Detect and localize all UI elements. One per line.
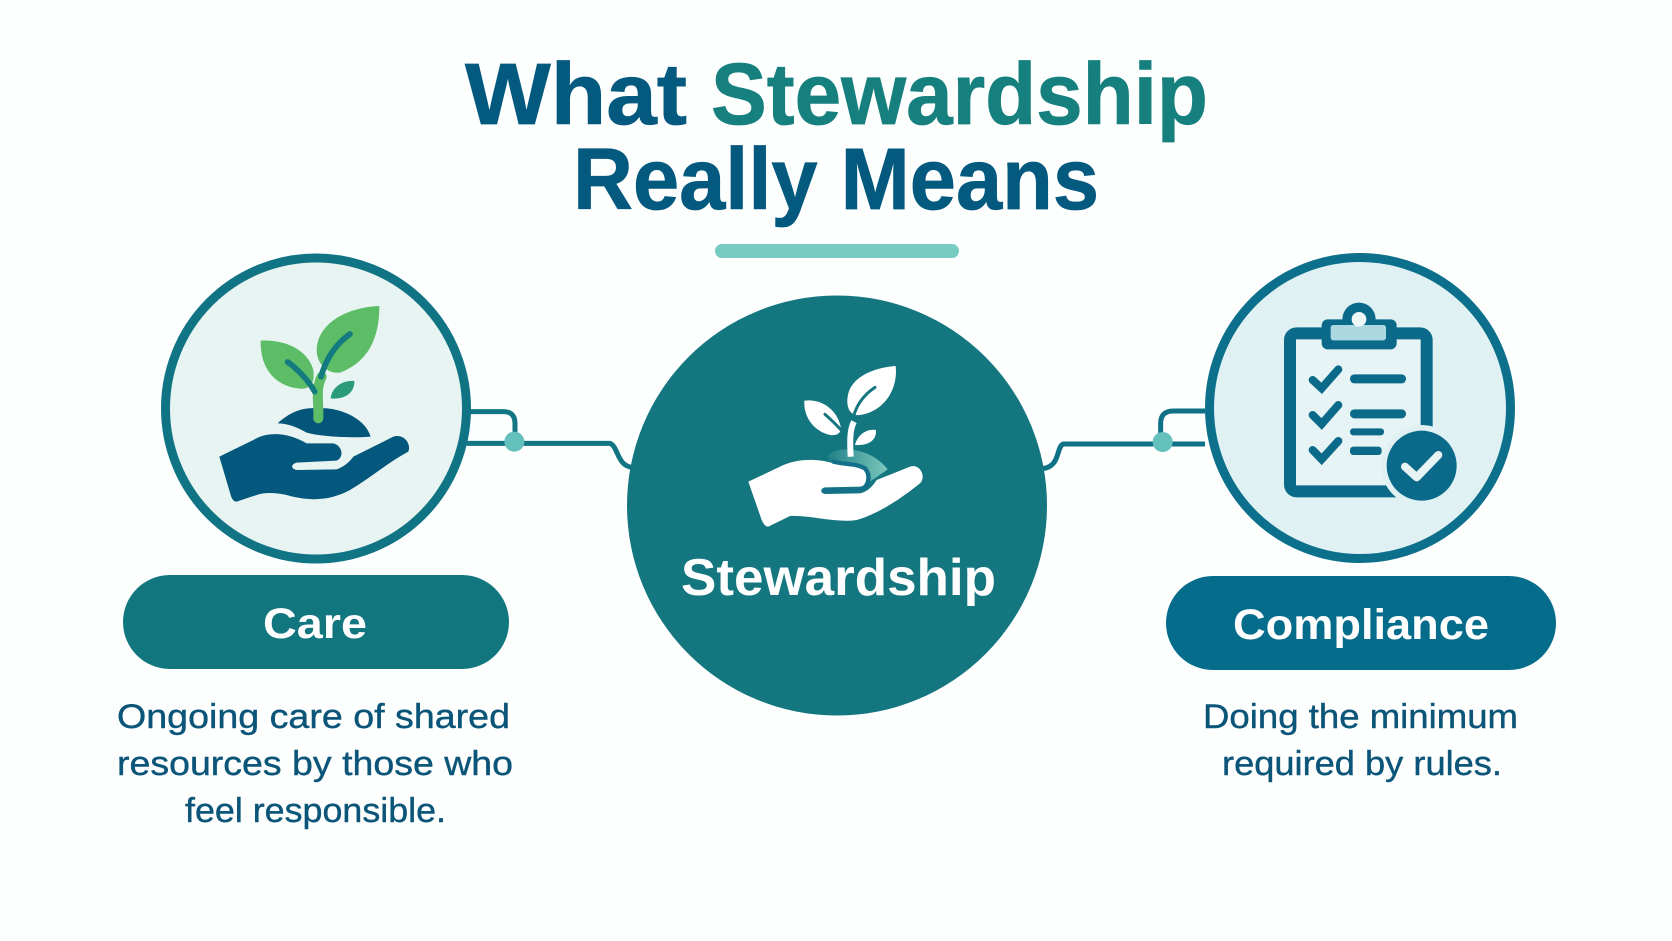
title: What xyxy=(465,46,687,143)
panel: compliance circle with icon xyxy=(1210,258,1510,558)
icon: clipboard with checklist xyxy=(1290,303,1462,506)
pill: compliance xyxy=(1166,576,1556,670)
icon: hand holding seedling xyxy=(219,306,409,502)
text: care description xyxy=(117,698,513,830)
connector: care to stewardship xyxy=(467,412,632,467)
text: care description: feel responsible. xyxy=(185,792,446,830)
text: compliance description: Doing the minimum xyxy=(1203,698,1518,736)
icon: white hand holding seedling xyxy=(748,366,923,527)
text: care description: resources by those who xyxy=(117,745,513,783)
title: Really Means xyxy=(573,131,1099,228)
text: compliance description xyxy=(1203,698,1518,783)
text: care description: Ongoing care of shared xyxy=(117,698,510,736)
title: Stewardship xyxy=(711,46,1208,143)
connector: compliance to stewardship xyxy=(1043,411,1205,469)
title xyxy=(465,46,1208,228)
pill: care xyxy=(123,575,509,669)
text: compliance description: required by rules. xyxy=(1222,745,1502,783)
label: stewardship: Stewardship xyxy=(681,549,996,607)
title underline xyxy=(715,244,959,258)
pill: care: Care xyxy=(263,600,367,648)
pill: compliance: Compliance xyxy=(1233,601,1489,649)
panel: care circle with icon xyxy=(166,258,466,559)
panel: stewardship center circle xyxy=(627,296,1047,716)
